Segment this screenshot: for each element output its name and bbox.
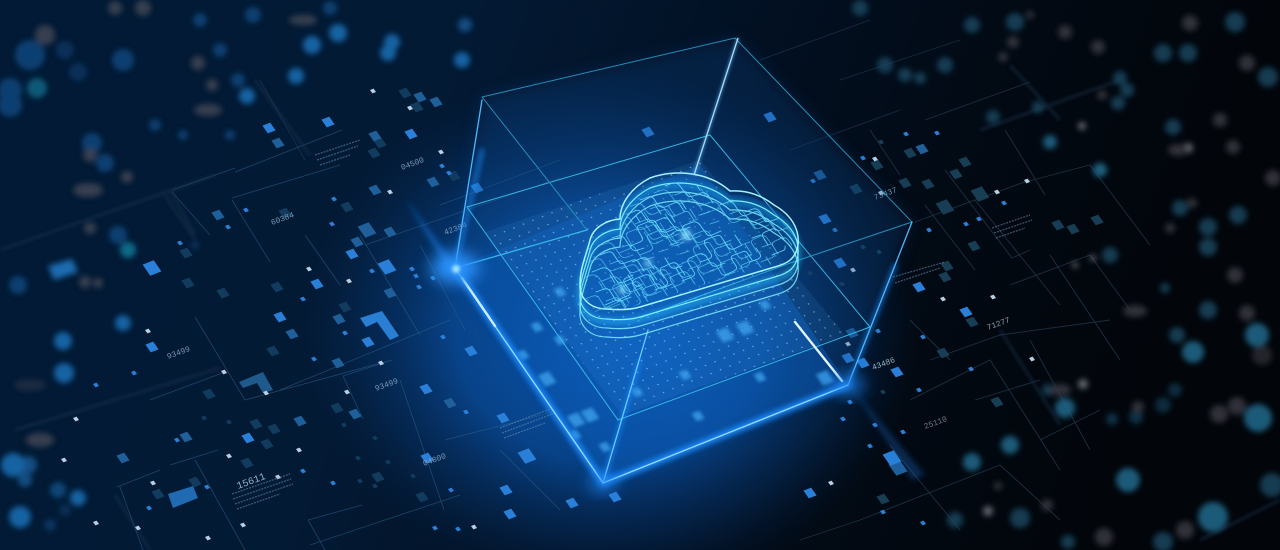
pale pixel squares xyxy=(61,89,1035,540)
L-shaped data blocks xyxy=(239,311,399,393)
data readout blocks xyxy=(232,140,1032,509)
data labels: 04800 xyxy=(422,452,448,469)
cube upper volume tint xyxy=(455,38,912,483)
glow under edges xyxy=(455,150,895,483)
cloud glow xyxy=(580,185,798,322)
wide data block xyxy=(168,486,198,508)
out-of-focus bokeh, right xyxy=(852,0,1280,550)
data labels: 71277 xyxy=(986,316,1012,333)
corner flares xyxy=(431,253,864,492)
floor blocks xyxy=(516,287,834,452)
stacked outlines xyxy=(580,173,798,338)
cube base glow xyxy=(455,165,848,483)
bright verticals xyxy=(455,100,912,483)
cloud xyxy=(580,173,798,338)
circuit grid lines xyxy=(117,130,580,550)
cloud sparks xyxy=(618,230,691,294)
data labels: 04500 xyxy=(400,156,426,173)
bright data squares xyxy=(93,112,1007,531)
data labels: 15611 xyxy=(236,472,268,493)
medium data squares xyxy=(116,92,929,476)
out-of-focus bokeh, left xyxy=(0,0,472,531)
data labels: 43486 xyxy=(871,356,897,373)
data labels: 93499 xyxy=(374,377,400,394)
data labels xyxy=(166,156,1012,493)
faint data squares xyxy=(151,88,461,502)
circuit traces xyxy=(581,182,795,316)
upper front vertical beam xyxy=(694,38,738,175)
dotted circuit floor xyxy=(485,160,845,415)
base edges xyxy=(455,268,848,483)
data labels: 93499 xyxy=(166,345,192,362)
thin inner frame xyxy=(455,38,912,420)
light rays beyond corners xyxy=(405,198,925,480)
data labels: 60384 xyxy=(270,211,296,228)
cloud tint xyxy=(580,177,798,314)
cube wireframe xyxy=(455,38,912,483)
data labels: 73437 xyxy=(873,186,899,203)
data labels: 42384 xyxy=(443,221,469,238)
data labels: 25110 xyxy=(923,415,949,432)
